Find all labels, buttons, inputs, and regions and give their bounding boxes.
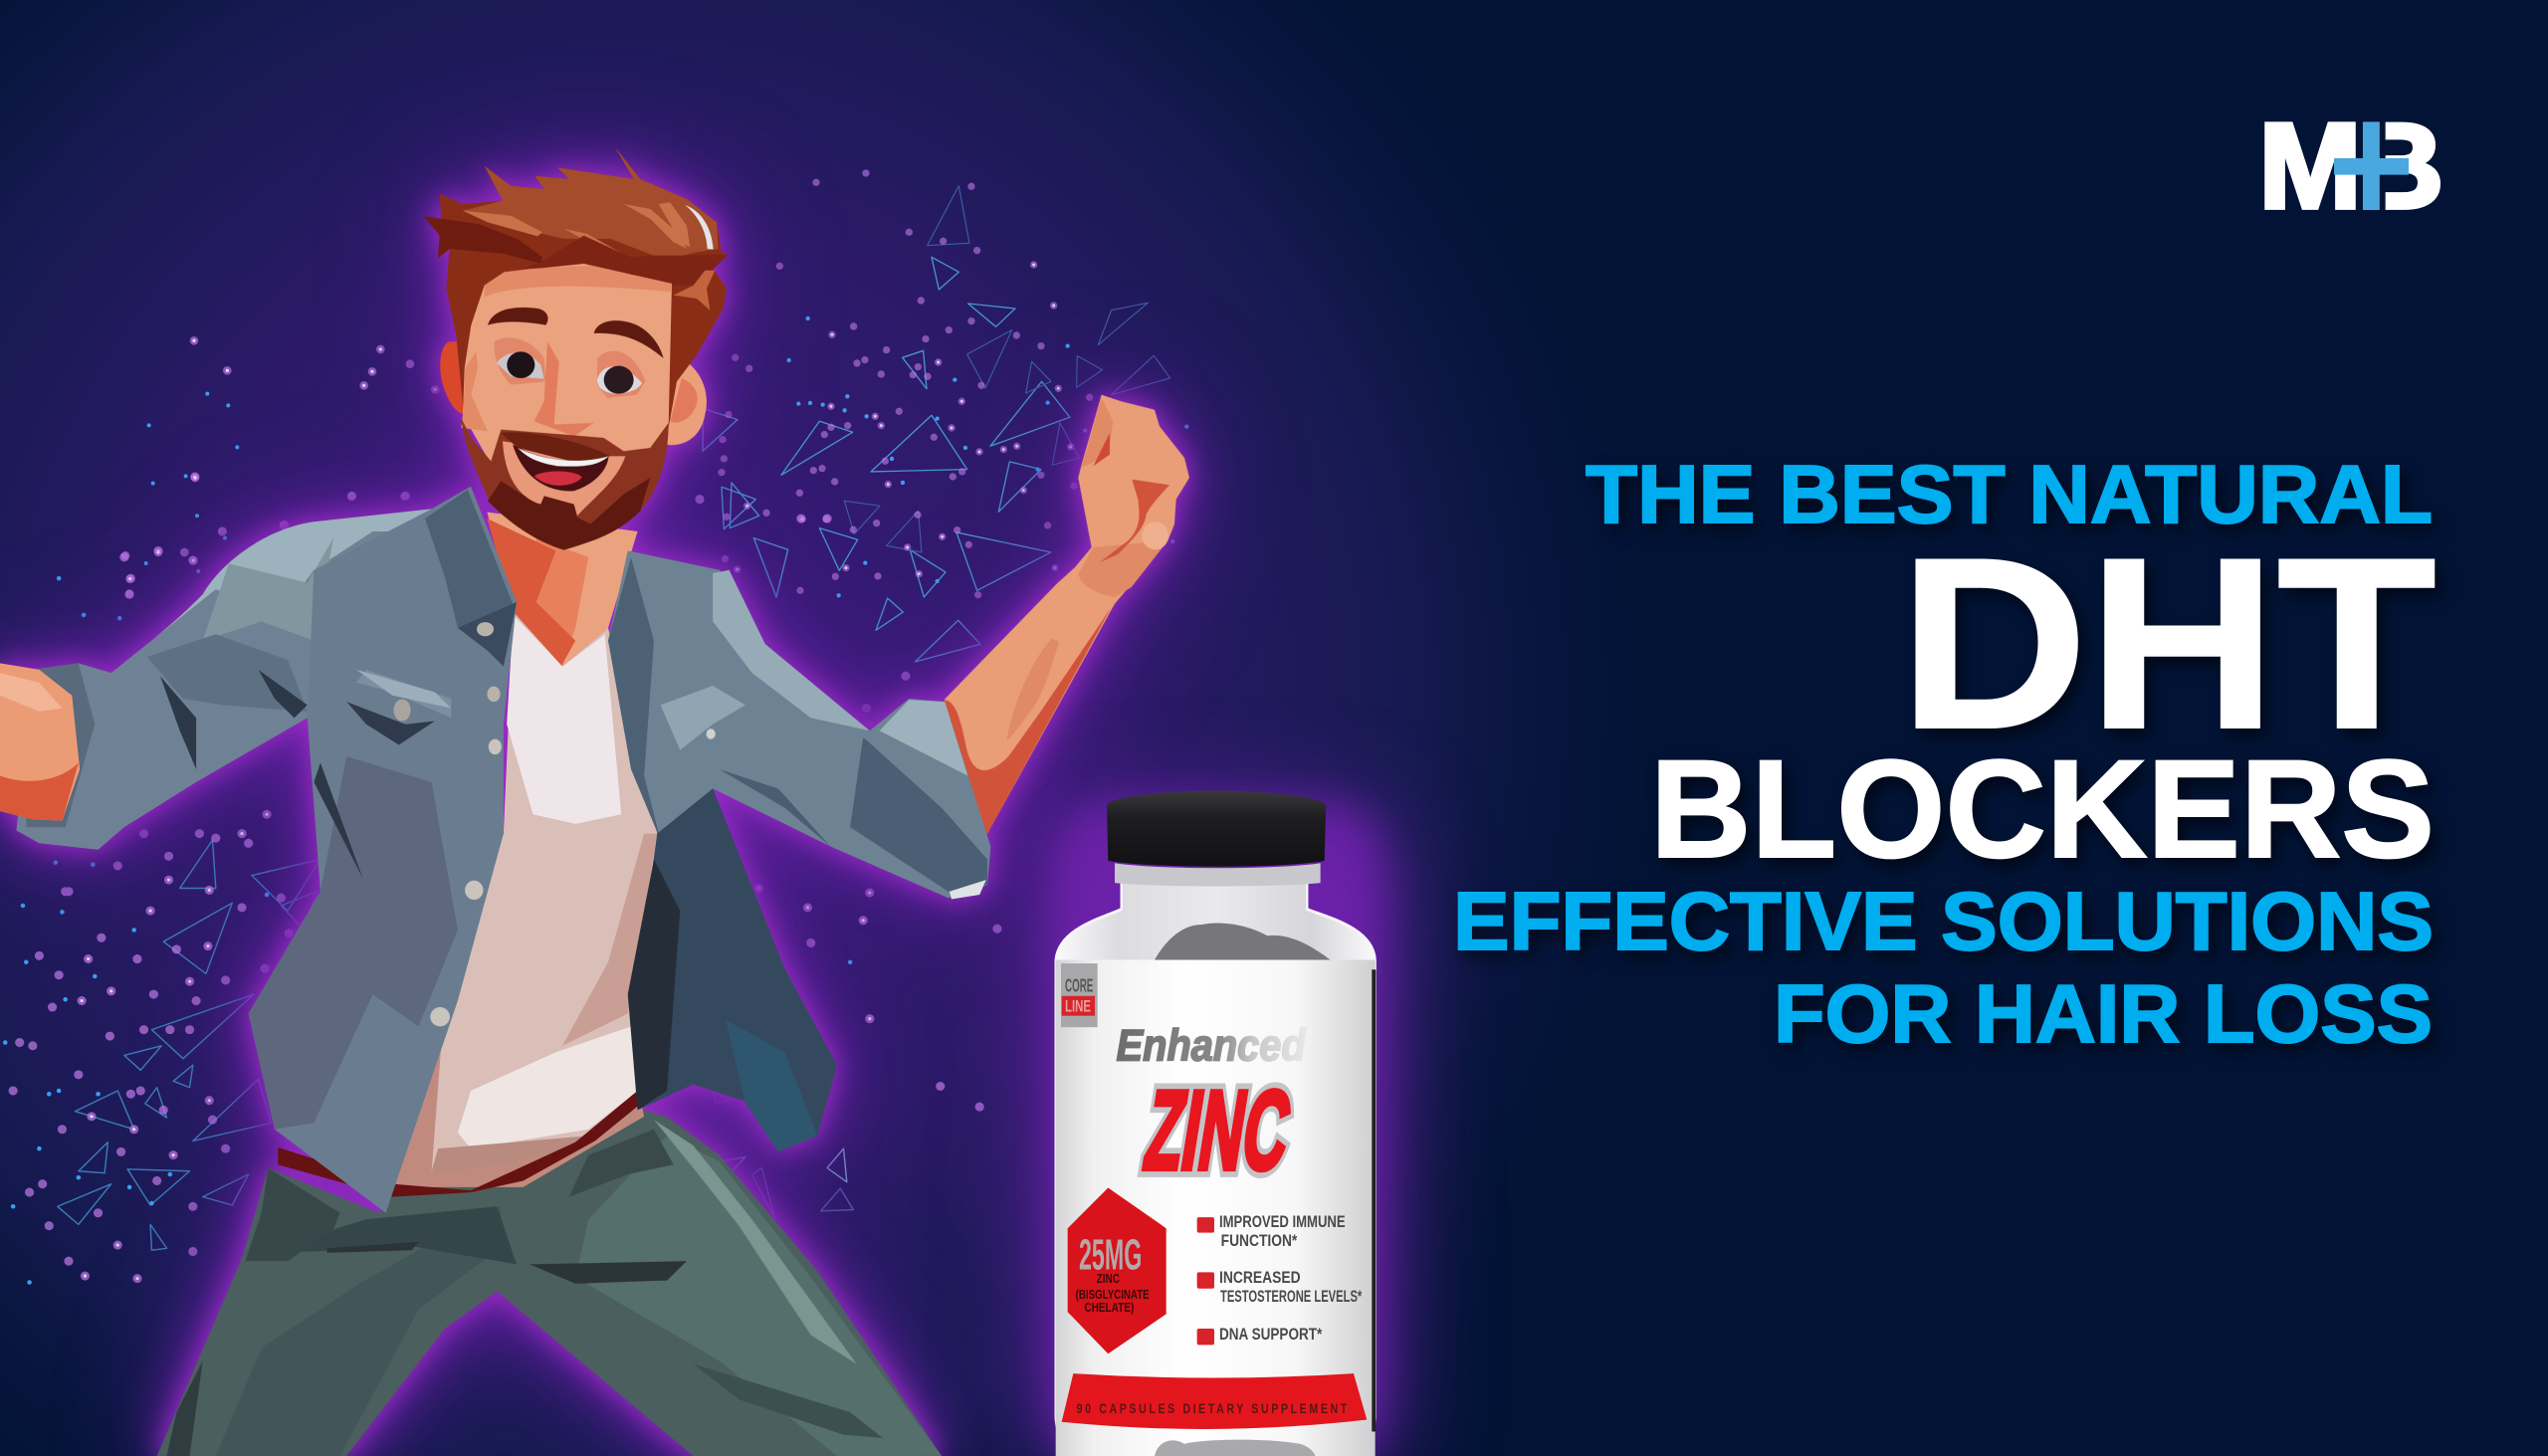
product bottle: [1056, 790, 1376, 1456]
dosage hexagon: CHELATE): [1084, 1301, 1134, 1316]
particle field: triangles: [58, 186, 1170, 1250]
dosage hexagon: ZINC: [1097, 1272, 1120, 1286]
left forearm skin: [0, 663, 80, 821]
buttons: [477, 622, 494, 636]
eyebrows: [488, 308, 548, 325]
logo: B: [2354, 99, 2443, 234]
dots upper left: [125, 340, 435, 594]
denim jacket: [16, 487, 990, 1213]
t-shirt: [386, 612, 657, 1187]
right sleeve and back: [608, 550, 990, 898]
benefit list: [1197, 1213, 1362, 1345]
product name: ZINC: [1138, 1069, 1298, 1193]
beard: [461, 418, 669, 550]
hair highlights: [463, 147, 719, 257]
belt: [278, 1091, 641, 1197]
face: [463, 264, 672, 520]
left front panel: [249, 487, 517, 1213]
mustache: [501, 432, 610, 463]
ear right: [665, 361, 707, 445]
core line badge: LINE: [1065, 998, 1091, 1016]
triangles near forearm: [876, 598, 980, 662]
headline line: for hair loss: FOR HAIR LOSS: [1774, 967, 2433, 1060]
headline line: the best natural: THE BEST NATURAL: [1586, 448, 2433, 540]
headline line: blockers: BLOCKERS: [1650, 730, 2435, 887]
headline: [1453, 448, 2437, 1060]
cap: [1107, 790, 1326, 867]
dosage hexagon: [1068, 1188, 1167, 1353]
glow behind bottle: [1045, 806, 1388, 1456]
trousers: [157, 1110, 942, 1456]
dosage hexagon: (BISGLYCINATE: [1076, 1288, 1150, 1302]
benefit list: TESTOSTERONE LEVELS*: [1220, 1288, 1362, 1307]
mouth: [513, 445, 609, 491]
dosage hexagon: 25MG: [1079, 1231, 1142, 1279]
triangles lower left and lower right: [58, 840, 853, 1250]
head: [424, 147, 729, 550]
label edge: [1372, 969, 1376, 1431]
logo: M: [2258, 99, 2362, 234]
illustration: man: [0, 147, 1189, 1456]
core line badge: CORE: [1065, 976, 1093, 996]
hair base: [424, 147, 729, 428]
chin skin: [503, 441, 625, 516]
label: [1056, 960, 1376, 1456]
eyes: [494, 337, 545, 385]
dots left and lower: [5, 477, 997, 1283]
product name: ZINC: [1138, 1069, 1298, 1193]
left sleeve: [16, 509, 458, 850]
ear left: [440, 341, 466, 415]
red footer band: 90 CAPSULES DIETARY SUPPLEMENT: [1077, 1400, 1348, 1416]
red footer band: [1062, 1373, 1367, 1429]
logo: [2258, 99, 2443, 234]
jacket flap and interior: [631, 788, 837, 1151]
nose shade: [534, 341, 594, 436]
capsules: [1155, 923, 1331, 960]
benefit list: FUNCTION*: [1221, 1232, 1298, 1250]
headline line: effective solutions: EFFECTIVE SOLUTIONS: [1453, 875, 2434, 967]
neck: [487, 513, 638, 667]
particle field: glowing dots: [5, 173, 1186, 1283]
dots upper right: [722, 173, 1186, 595]
glow behind man: [0, 147, 1189, 1456]
headline line: DHT: DHT: [1899, 507, 2437, 779]
benefit list: INCREASED: [1219, 1269, 1301, 1288]
benefit list: IMPROVED IMMUNE: [1219, 1213, 1346, 1231]
triangles upper right: [703, 186, 1170, 597]
bottle glass: [1056, 877, 1376, 1456]
neck ring: [1115, 863, 1321, 886]
capsules bottom: [1155, 1440, 1316, 1456]
brand name: Enhanced: [1117, 1022, 1307, 1070]
core line badge: [1061, 963, 1098, 1027]
raised forearm and fist: [944, 395, 1189, 834]
forehead shade: [485, 266, 672, 297]
benefit list: DNA SUPPORT*: [1219, 1327, 1322, 1345]
